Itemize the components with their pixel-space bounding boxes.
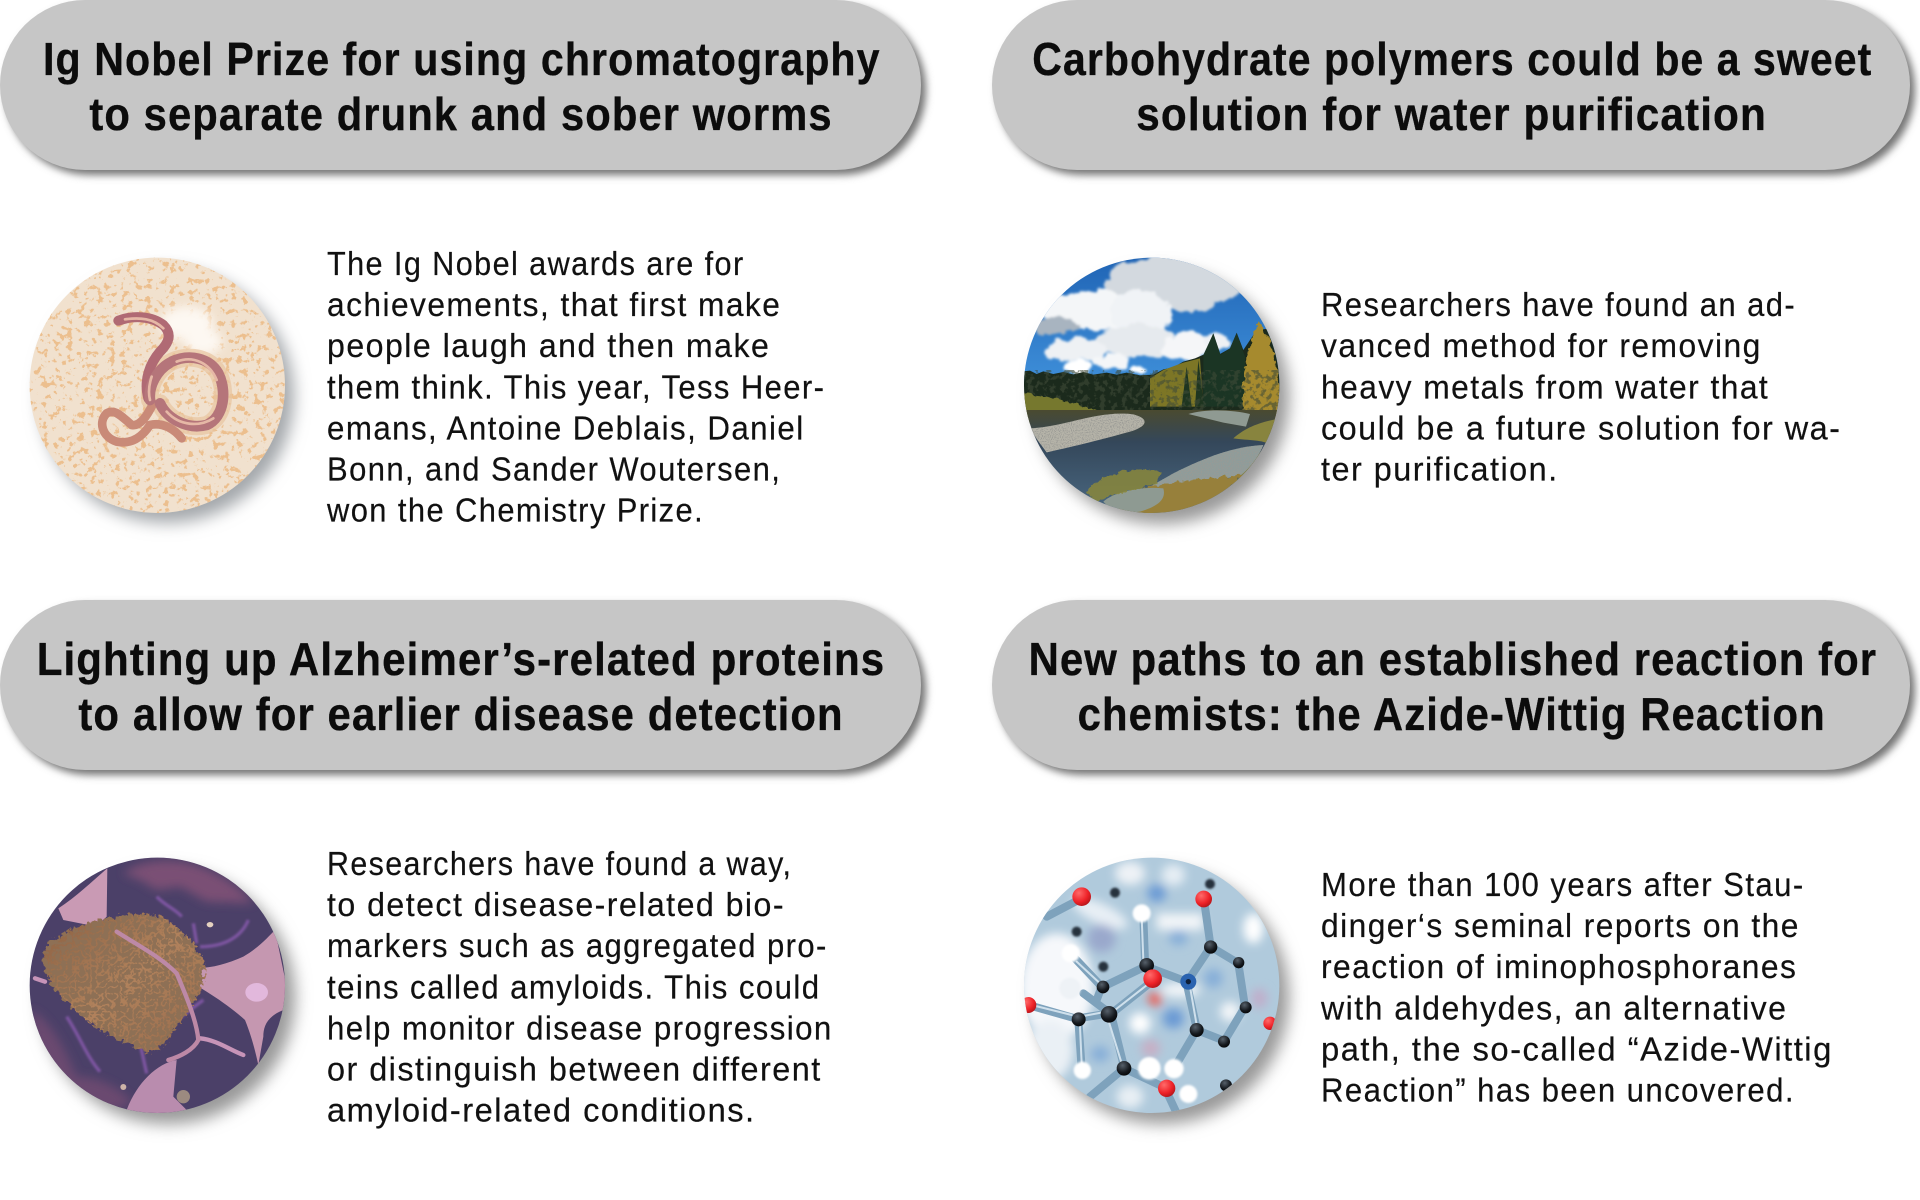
photo: river landscape	[1020, 253, 1293, 524]
right bank	[1086, 420, 1275, 513]
photo: ball-and-stick molecule model	[1020, 853, 1289, 1124]
photo: worm on agar plate	[27, 253, 294, 523]
body text: Ig Nobel Prize: them think. This year, Tess Heer-	[327, 368, 825, 405]
heading pill: Carbohydrate polymers	[992, 0, 1915, 175]
heading pill: Ig Nobel Prize	[0, 0, 926, 175]
body text: Azide-Wittig Reaction: reaction of iminophosphoranes	[1321, 948, 1797, 985]
body text: Ig Nobel Prize	[326, 245, 825, 529]
panel: Alzheimer's proteins	[0, 600, 926, 1129]
body text: Azide-Wittig Reaction: Reaction” has been uncovered.	[1321, 1072, 1795, 1108]
body text: Carbohydrate polymers: ter purification.	[1321, 450, 1559, 488]
panel: Carbohydrate polymers	[992, 0, 1915, 524]
body text: Alzheimer's proteins: help monitor disease progression	[327, 1009, 833, 1046]
body text: Ig Nobel Prize: people laugh and then make	[327, 327, 770, 364]
water	[1020, 410, 1287, 517]
body text: Carbohydrate polymers: Researchers have found an ad-	[1321, 286, 1796, 323]
heading pill: Azide-Wittig Reaction	[992, 600, 1915, 775]
body text: Carbohydrate polymers: heavy metals from water that	[1321, 368, 1769, 405]
body text: Alzheimer's proteins: markers such as aggregated pro-	[327, 927, 828, 964]
body text: Alzheimer's proteins: to detect disease-related bio-	[327, 886, 785, 923]
heading pill: Ig Nobel Prize: to separate drunk and sober worms	[89, 88, 833, 140]
body text: Alzheimer's proteins: Researchers have found a way,	[327, 845, 792, 882]
body text: Azide-Wittig Reaction: More than 100 years after Stau-	[1321, 866, 1805, 903]
body text: Carbohydrate polymers	[1321, 286, 1841, 488]
body text: Ig Nobel Prize: Bonn, and Sander Woutersen,	[327, 450, 781, 488]
forest band	[1020, 321, 1287, 427]
body text: Alzheimer's proteins: teins called amyloids. This could	[327, 968, 820, 1005]
body text: Carbohydrate polymers: could be a future solution for wa-	[1321, 409, 1841, 446]
heading pill: Alzheimer's proteins: Lighting up Alzheimer’s-related proteins	[37, 633, 885, 685]
body text: Azide-Wittig Reaction: with aldehydes, an alternative	[1320, 989, 1788, 1026]
heading pill: Alzheimer's proteins: to allow for earlier disease detection	[78, 688, 844, 740]
panel: Azide-Wittig Reaction	[992, 600, 1915, 1124]
photo: amyloid plaque among neurons	[27, 853, 295, 1124]
heading pill: Ig Nobel Prize: Ig Nobel Prize for using chromatography	[43, 33, 881, 85]
body text: Alzheimer's proteins: amyloid-related conditions.	[327, 1092, 756, 1129]
left gravel bar	[1031, 414, 1145, 452]
body text: Ig Nobel Prize: won the Chemistry Prize.	[326, 492, 704, 529]
body text: Alzheimer's proteins	[327, 845, 833, 1129]
heading pill: Azide-Wittig Reaction: chemists: the Azide-Wittig Reaction	[1078, 688, 1826, 740]
panel: Ig Nobel Prize	[0, 0, 926, 529]
body text: Ig Nobel Prize: The Ig Nobel awards are for	[327, 245, 745, 282]
body text: Azide-Wittig Reaction: path, the so-called “Azide-Wittig	[1321, 1030, 1833, 1067]
heading pill: Carbohydrate polymers: solution for water purification	[1136, 88, 1767, 140]
body text: Azide-Wittig Reaction: dinger‘s seminal reports on the	[1321, 907, 1800, 944]
body text: Alzheimer's proteins: or distinguish between different	[327, 1050, 822, 1088]
body text: Azide-Wittig Reaction	[1320, 866, 1833, 1108]
body text: Ig Nobel Prize: achievements, that first make	[327, 286, 781, 323]
heading pill: Alzheimer's proteins	[0, 600, 926, 775]
body text: Ig Nobel Prize: emans, Antoine Deblais, Daniel	[327, 409, 805, 446]
body text: Carbohydrate polymers: vanced method for removing	[1321, 327, 1762, 364]
